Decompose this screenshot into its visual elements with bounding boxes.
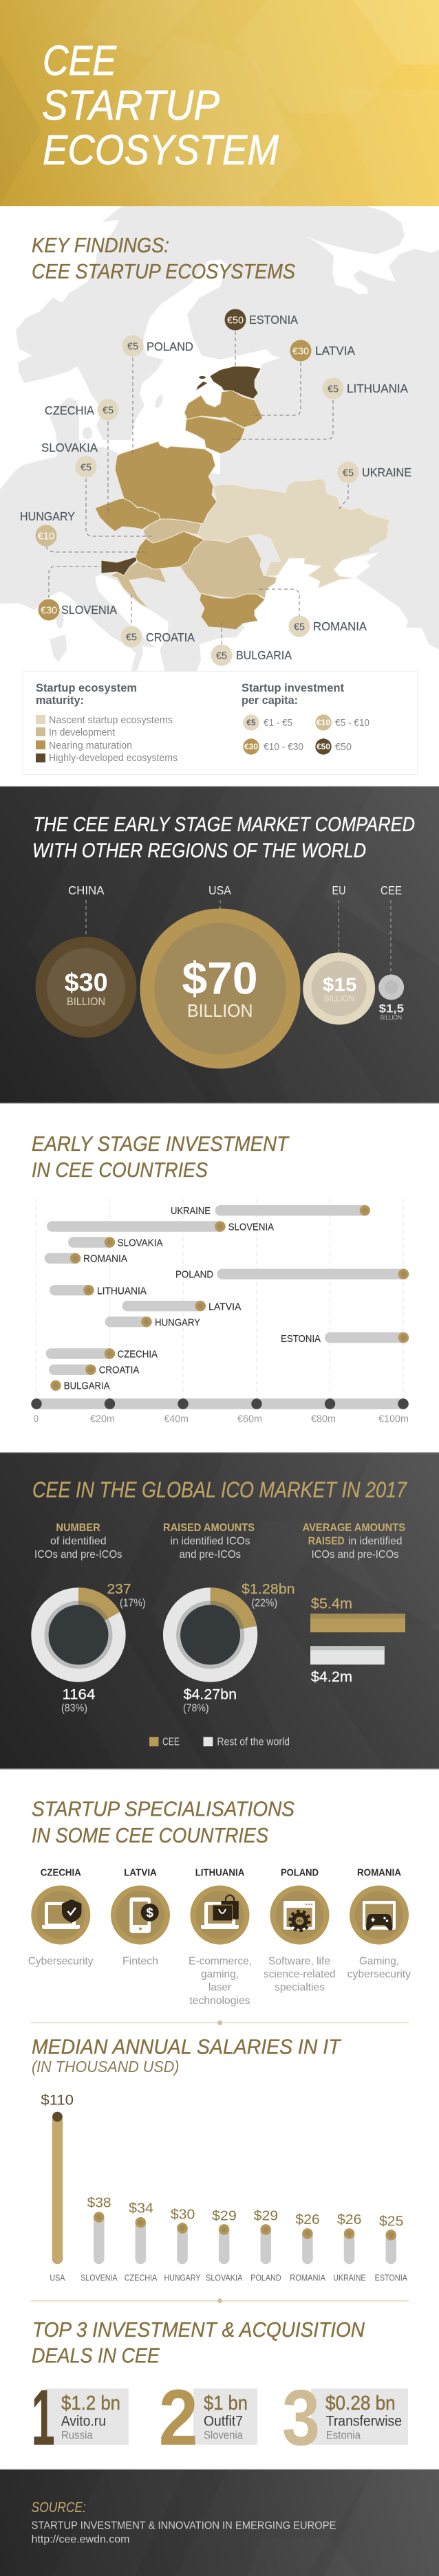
specialisation: Czechia (28, 1867, 94, 1967)
title: CEE (43, 37, 117, 84)
country: Bulgaria (200, 593, 265, 630)
column: Romania: $26 (295, 2212, 320, 2227)
badge: Lithuania (322, 378, 408, 399)
heading: key findings: CEE STARTUP ECOSYSTEMS (32, 260, 296, 283)
donut: raised amounts: (78%) (183, 1702, 209, 1714)
bubble: EU (303, 883, 375, 1024)
row: Romania: ROMANIA (83, 1254, 127, 1265)
specialisation: Romania: cybersecurity (347, 1969, 411, 1980)
column heading: number: ICOs and pre-ICOs (34, 1549, 122, 1561)
ICO legend: Rest of the world (217, 1736, 290, 1748)
country: Lithuania (185, 417, 245, 454)
deal: Transferwise: Estonia (326, 2429, 361, 2442)
badge: Bulgaria: €5 (216, 650, 227, 661)
donut: number of ICOs: 237 (107, 1581, 131, 1597)
column heading: average amounts: AVERAGE AMOUNTS (303, 1522, 405, 1534)
legend: maturity: Highly-developed ecosystems (49, 752, 178, 764)
chart axis: €40m (164, 1413, 189, 1425)
heading: key findings: KEY FINDINGS: (32, 234, 169, 257)
badge: Bulgaria: BULGARIA (236, 648, 292, 662)
country: Slovenia (101, 557, 137, 575)
source text (32, 2520, 336, 2545)
column: Slovenia: SLOVENIA (81, 2273, 118, 2282)
donut: number of ICOs: (83%) (61, 1702, 87, 1714)
specialisation: Poland: POLAND (281, 1867, 319, 1878)
column: Czechia: $34 (129, 2201, 153, 2216)
badge: Czechia (45, 399, 118, 421)
column heading: average amounts: RAISED (308, 1536, 345, 1548)
donut: number of ICOs (31, 1581, 146, 1714)
map of Europe (0, 206, 439, 672)
donut: raised amounts: $1.28bn (242, 1581, 295, 1597)
badge: Ukraine: UKRAINE (362, 465, 411, 479)
title: STARTUP (42, 82, 220, 129)
donut: raised amounts (163, 1581, 295, 1714)
row: Bulgaria (50, 1380, 110, 1392)
deal: Outfit7: Slovenia (204, 2429, 243, 2442)
bubble: USA: BILLION (187, 1000, 253, 1021)
specialisation: Poland: Software, life (268, 1955, 330, 1967)
badge: Romania (289, 616, 367, 637)
row: Hungary (105, 1317, 200, 1328)
source text: http://cee.ewdn.com (32, 2533, 129, 2545)
column: Czechia: CZECHIA (125, 2273, 158, 2282)
specialisation: Lithuania (189, 1867, 252, 2007)
panel: startup specialisations (28, 1798, 411, 2007)
badge: Croatia (121, 626, 195, 648)
legend: investment per capita: €1 - €5 (264, 717, 292, 729)
column: Hungary: $30 (171, 2206, 195, 2222)
row: Poland (175, 1269, 409, 1281)
legend: investment per capita: €5 (246, 719, 256, 727)
badge: Poland: POLAND (147, 340, 193, 353)
title (42, 37, 279, 173)
column: Slovakia: SLOVAKIA (206, 2273, 243, 2282)
bubble: CEE: BILLION (381, 1014, 402, 1021)
icon: browser and gear: </> (297, 1919, 302, 1924)
bubble: EU: BILLION (324, 994, 354, 1004)
panel: top 3 deals (32, 2318, 408, 2462)
column: Romania: ROMANIA (290, 2273, 326, 2282)
heading: top 3 deals: TOP 3 INVESTMENT & ACQUISITION (32, 2318, 365, 2342)
badge: Hungary: €10 (38, 531, 54, 542)
column: Slovenia: $38 (87, 2195, 111, 2211)
bubble: USA (140, 883, 300, 1068)
column heading: raised amounts: in identified ICOs (171, 1536, 250, 1548)
legend: investment per capita: per capita: (242, 694, 298, 707)
bubble: China (36, 883, 136, 1038)
map legend (23, 671, 417, 774)
specialisation: Romania: ROMANIA (357, 1867, 401, 1878)
country: Ukraine (197, 478, 390, 588)
badge: Lithuania: LITHUANIA (347, 382, 408, 395)
row: Slovenia: SLOVENIA (228, 1222, 274, 1233)
row: Croatia: CROATIA (99, 1365, 140, 1376)
heading: key findings (32, 234, 296, 283)
row: Estonia: ESTONIA (281, 1334, 321, 1345)
column: Ukraine (333, 2212, 366, 2282)
specialisation: Latvia: LATVIA (124, 1867, 157, 1878)
row: Romania (45, 1253, 127, 1265)
row: Lithuania: LITHUANIA (97, 1286, 147, 1297)
badge: Romania: €5 (294, 621, 305, 632)
legend: maturity: In development (49, 727, 116, 738)
heading: early stage investment: EARLY STAGE INVESTMENT (32, 1132, 290, 1156)
specialisation: Poland: specialties (275, 1982, 325, 1994)
specialisation: Lithuania: LITHUANIA (195, 1867, 244, 1878)
specialisation: Lithuania: technologies (190, 1995, 250, 2007)
badge: Slovenia (39, 599, 117, 620)
row: Slovakia: SLOVAKIA (117, 1238, 163, 1249)
badge: Slovenia: €30 (41, 605, 57, 616)
row: Czechia (46, 1348, 158, 1360)
bubble: EU: EU (332, 883, 345, 897)
badge: Poland (122, 335, 193, 356)
column heading: average amounts (303, 1522, 405, 1561)
badge: Czechia: €5 (103, 404, 114, 417)
deal: Avito.ru (32, 2374, 129, 2462)
badge: Croatia: CROATIA (146, 630, 195, 644)
specialisation: Lithuania: laser (208, 1982, 232, 1994)
icon: phone and coin: $ (146, 1906, 153, 1921)
heading: market comparison: WITH OTHER REGIONS OF THE WORLD (32, 839, 366, 862)
legend: maturity: Startup ecosystem (36, 681, 137, 694)
panel: early stage investment (31, 1132, 409, 1425)
chart axis: €20m (90, 1413, 115, 1425)
deal: Transferwise: 3 (282, 2374, 320, 2462)
badge: Croatia: €5 (126, 631, 137, 643)
country: Latvia (184, 390, 263, 428)
donut: number of ICOs: 1164 (62, 1687, 96, 1703)
bubble: China: CHINA (68, 883, 105, 897)
legend: investment per capita: €30 (244, 743, 258, 751)
badge: Czechia: CZECHIA (45, 404, 94, 417)
column: Romania (290, 2212, 326, 2282)
source text: STARTUP INVESTMENT & INNOVATION IN EMERGING EUROPE (32, 2520, 336, 2531)
country: Estonia (196, 366, 261, 399)
deal: Avito.ru: 1 (32, 2374, 55, 2462)
column heading: raised amounts (163, 1522, 255, 1561)
heading: market comparison (32, 813, 415, 862)
row: Latvia (122, 1301, 242, 1312)
row: Ukraine (171, 1205, 370, 1217)
badge: Hungary (20, 509, 75, 546)
specialisation: Czechia: Cybersecurity (28, 1955, 94, 1967)
chart axis: €60m (237, 1413, 262, 1425)
column: Slovakia (206, 2208, 243, 2282)
bubble: China: BILLION (67, 996, 105, 1008)
panel: market comparison (0, 786, 439, 1104)
icon: monitor and controller (363, 1901, 396, 1930)
country: Czechia (95, 498, 160, 531)
badge: Lithuania: €5 (328, 384, 339, 395)
specialisation: Lithuania: gaming, (201, 1969, 239, 1980)
bubble: EU: $15 (323, 974, 356, 995)
donut: raised amounts: $4.27bn (184, 1687, 237, 1703)
column: Hungary (164, 2206, 201, 2282)
column heading: average amounts: in identified (348, 1536, 402, 1548)
row: Slovenia (47, 1221, 274, 1233)
heading: top 3 deals (32, 2318, 365, 2368)
panel: median salaries (32, 2035, 408, 2282)
heading: median salaries: (IN THOUSAND USD) (32, 2058, 179, 2076)
column: Poland (250, 2208, 281, 2282)
heading: specialisations: STARTUP SPECIALISATIONS (32, 1798, 295, 1821)
heading: median salaries (32, 2035, 342, 2076)
specialisation: Romania (347, 1867, 411, 1980)
column heading: number: of identified (50, 1536, 107, 1548)
specialisation: Czechia: CZECHIA (41, 1867, 81, 1878)
legend: maturity: maturity: (36, 694, 84, 707)
column: Poland: POLAND (250, 2273, 281, 2282)
icon: phone and coin (129, 1897, 159, 1933)
bar chart: average amounts: $4.2m (311, 1669, 352, 1685)
badge: Slovakia: SLOVAKIA (41, 441, 98, 454)
column heading: raised amounts: RAISED AMOUNTS (163, 1522, 255, 1534)
row: Slovakia (68, 1237, 163, 1249)
badge: Estonia: €50 (227, 315, 244, 326)
badge: Romania: ROMANIA (313, 619, 367, 633)
country: Hungary (136, 531, 204, 569)
deal: Transferwise: Transferwise (326, 2414, 402, 2430)
column: Hungary: HUNGARY (164, 2273, 201, 2282)
specialisation: Poland: science-related (264, 1969, 336, 1980)
donut: raised amounts: (22%) (252, 1598, 277, 1609)
column heading: number: NUMBER (56, 1522, 100, 1534)
column: USA: USA (50, 2273, 65, 2282)
deal: Transferwise (282, 2374, 408, 2462)
badge: Latvia: €30 (292, 345, 309, 357)
column: Estonia: $25 (379, 2213, 403, 2229)
legend: investment per capita: €10 - €30 (264, 741, 303, 753)
column chart: salaries (41, 2093, 408, 2282)
specialisation: Romania: Gaming, (359, 1955, 399, 1967)
legend: investment per capita: €10 (317, 719, 330, 727)
country: Croatia (110, 562, 167, 609)
badge: Slovakia (41, 441, 98, 477)
column heading: number (34, 1522, 122, 1561)
column: Czechia (125, 2201, 158, 2282)
chart axis (31, 1398, 409, 1425)
column: USA (41, 2093, 74, 2282)
row: Czechia: CZECHIA (117, 1349, 158, 1360)
ICO legend: CEE (162, 1736, 180, 1748)
badge: Latvia: LATVIA (315, 344, 355, 357)
deal: Avito.ru: Avito.ru (61, 2414, 106, 2430)
legend: maturity: Nascent startup ecosystems (49, 714, 173, 726)
bar chart: average amounts (310, 1596, 405, 1685)
column: Slovenia (81, 2195, 118, 2282)
region leader lines (86, 900, 391, 975)
legend: investment per capita (242, 681, 370, 755)
column: USA: $110 (41, 2093, 74, 2109)
row: Hungary: HUNGARY (155, 1317, 200, 1328)
country: Slovakia (143, 519, 202, 543)
bubble: USA: USA (208, 883, 231, 897)
badge: Slovenia: SLOVENIA (61, 603, 117, 617)
row: Lithuania (50, 1285, 147, 1297)
heading: early stage investment (32, 1132, 290, 1182)
country: Romania (180, 536, 277, 598)
panel: source footer (0, 2469, 439, 2576)
badge: Ukraine: €5 (343, 467, 354, 478)
bubble: CEE: $1,5 (379, 1002, 404, 1015)
range chart (45, 1205, 409, 1392)
deal: Avito.ru: Russia (61, 2429, 93, 2442)
panel: key findings map (0, 206, 439, 774)
deal: Outfit7: 2 (159, 2374, 198, 2462)
legend: maturity (36, 681, 178, 764)
badge: Hungary: HUNGARY (20, 509, 75, 523)
title: ECOSYSTEM (43, 126, 279, 173)
row: Bulgaria: BULGARIA (64, 1381, 110, 1392)
heading: median salaries: MEDIAN ANNUAL SALARIES IN IT (32, 2035, 342, 2058)
deal: Avito.ru: $1.2 bn (61, 2392, 120, 2414)
deal: Transferwise: $0.28 bn (325, 2392, 396, 2414)
row: Poland: POLAND (175, 1270, 213, 1281)
column: Estonia (375, 2213, 408, 2282)
badge: Estonia: ESTONIA (249, 313, 298, 327)
legend: maturity: Nearing maturation (49, 740, 132, 751)
country: Poland (115, 441, 217, 524)
column: Estonia: ESTONIA (375, 2273, 408, 2282)
bubble: USA: $70 (182, 953, 257, 1004)
heading: top 3 deals: DEALS IN CEE (32, 2344, 160, 2368)
deal: Outfit7: $1 bn (204, 2392, 248, 2414)
bar chart: average amounts: $5.4m (311, 1596, 352, 1611)
ICO legend (149, 1736, 290, 1748)
heading: early stage investment: IN CEE COUNTRIES (32, 1158, 208, 1182)
deal: Outfit7 (159, 2374, 257, 2462)
column heading: average amounts: ICOs and pre-ICOs (312, 1549, 399, 1561)
header banner (0, 0, 439, 206)
dashed map leader lines (46, 331, 348, 644)
icon: laptop and shield (42, 1900, 81, 1929)
column heading: raised amounts: and pre-ICOs (179, 1549, 241, 1561)
specialisation: Latvia (111, 1867, 170, 1967)
panel: ICO market (0, 1452, 439, 1770)
specialisation: Poland (264, 1867, 336, 1994)
specialisation: Latvia: Fintech (122, 1955, 158, 1967)
row: Estonia (281, 1332, 409, 1345)
bubble: China: $30 (65, 969, 108, 997)
badge: Bulgaria (211, 645, 292, 665)
badge: Slovakia: €5 (81, 462, 92, 473)
column: Ukraine: UKRAINE (333, 2273, 366, 2282)
badge: Latvia (290, 340, 355, 362)
heading: specialisations (32, 1798, 295, 1847)
chart axis: 0 (34, 1413, 39, 1425)
chart axis: €100m (378, 1413, 409, 1425)
row: Ukraine: UKRAINE (171, 1206, 211, 1217)
badge: Estonia (224, 309, 298, 330)
source heading: SOURCE: (32, 2500, 86, 2516)
row: Croatia (49, 1365, 140, 1376)
legend: investment per capita: €50 (317, 743, 330, 751)
column: Ukraine: $26 (337, 2212, 361, 2227)
legend: investment per capita: €5 - €10 (335, 717, 370, 729)
icon: laptop and shopping bags (201, 1895, 239, 1929)
bubble: CEE (378, 883, 404, 1021)
column: Poland: $29 (254, 2208, 278, 2223)
column: Slovakia: $29 (212, 2208, 237, 2223)
legend: investment per capita: Startup investment (242, 681, 344, 694)
row: Latvia: LATVIA (208, 1301, 242, 1312)
chart axis: €80m (311, 1413, 336, 1425)
heading: specialisations: IN SOME CEE COUNTRIES (32, 1824, 269, 1847)
legend: investment per capita: €50 (335, 741, 352, 753)
badge: Ukraine (337, 462, 411, 483)
donut: number of ICOs: (17%) (120, 1598, 146, 1609)
badge: Poland: €5 (127, 341, 138, 352)
specialisation: Lithuania: E-commerce, (189, 1955, 252, 1967)
bubble: CEE: CEE (381, 883, 402, 897)
deal: Outfit7: Outfit7 (204, 2414, 243, 2430)
icon: browser and gear (283, 1901, 315, 1930)
